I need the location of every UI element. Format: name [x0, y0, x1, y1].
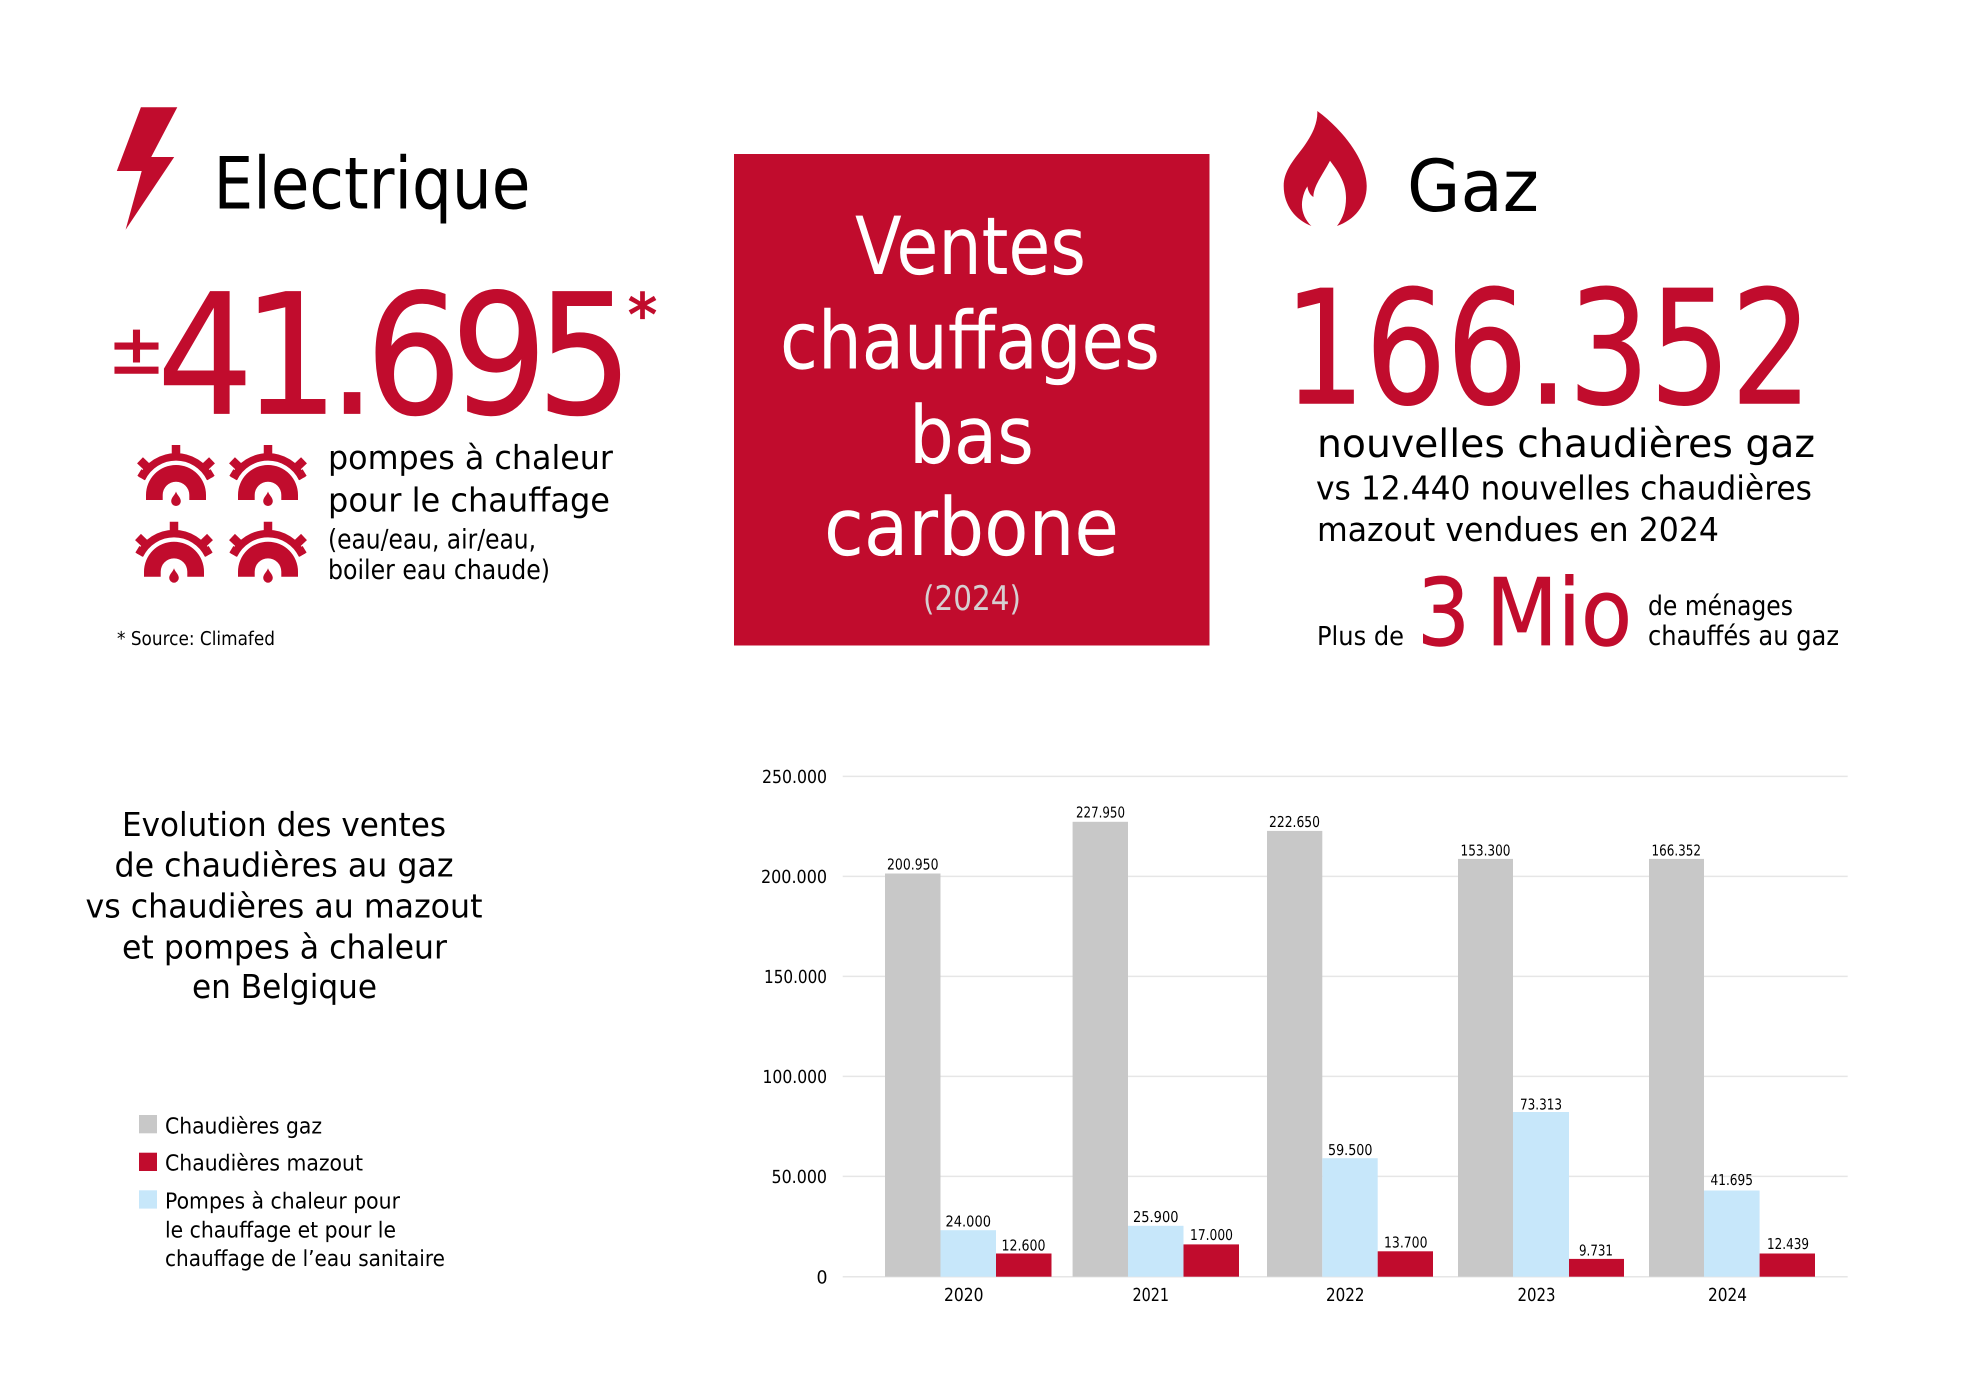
y axis labels: 0 [816, 1267, 828, 1288]
icon: flame [1284, 111, 1367, 226]
legend [139, 1114, 445, 1272]
big number: 166.352: 166.352 [1284, 257, 1812, 441]
title text: bas [909, 389, 1034, 482]
callout: 3 Mio households [1317, 559, 1839, 667]
legend: le chauffage et pour le [165, 1218, 396, 1243]
panel: central title [734, 154, 1210, 646]
icon: lightning bolt [117, 107, 177, 230]
legend: Pompes à chaleur pour [165, 1190, 401, 1215]
bars 2023 [1458, 842, 1624, 1306]
callout: 3 Mio households: Plus de [1317, 622, 1404, 652]
y axis labels: 50.000 [772, 1167, 827, 1188]
y axis labels: 150.000 [764, 967, 827, 988]
bars 2022: 222.650 [1269, 813, 1320, 831]
text: heat pump description [328, 438, 613, 586]
bars 2020: 24.000 [946, 1212, 991, 1230]
heading: chart title: de chaudières au gaz [114, 846, 454, 884]
bars 2020: 2020 [944, 1285, 984, 1306]
year: (2024) [923, 579, 1021, 619]
callout: 3 Mio households: 3 Mio [1417, 559, 1632, 667]
title text: Ventes [855, 200, 1086, 293]
panel: gaz [1284, 111, 1839, 667]
heading: chart title: Evolution des ventes [122, 805, 446, 844]
heading: Gaz: Gaz [1407, 144, 1539, 228]
text: heat pump description: pompes à chaleur [328, 438, 613, 477]
bars 2020: 12.600 [1002, 1236, 1046, 1254]
bars 2023: 9.731 [1579, 1242, 1613, 1260]
icons: heat pumps [138, 445, 304, 583]
bars 2021: 25.900 [1133, 1208, 1178, 1226]
y axis labels: 250.000 [762, 767, 827, 788]
title text: chauffages [780, 294, 1160, 388]
big number: 41.695: ± [108, 311, 165, 390]
legend: Chaudières gaz [165, 1114, 322, 1139]
callout: 3 Mio households: chauffés au gaz [1648, 621, 1839, 652]
bars 2020: 200.950 [887, 856, 938, 874]
source note: * Source: Climafed [117, 628, 275, 650]
bars 2022: 2022 [1326, 1285, 1364, 1306]
bars 2021: 227.950 [1076, 804, 1125, 822]
text: gas boiler description: mazout vendues en 2024 [1317, 510, 1719, 549]
text: heat pump description: pour le chauffage [328, 481, 610, 520]
y axis labels: 100.000 [762, 1067, 827, 1088]
bars 2022 [1267, 813, 1433, 1306]
bars 2024: 12.439 [1767, 1235, 1809, 1253]
bars 2022: 13.700 [1384, 1234, 1428, 1252]
heading: chart title: en Belgique [192, 967, 377, 1006]
text: gas boiler description: vs 12.440 nouvelles chaudières [1316, 468, 1812, 508]
callout: 3 Mio households: de ménages [1648, 591, 1793, 622]
bars 2024: 166.352 [1652, 842, 1701, 860]
bars 2023: 2023 [1518, 1285, 1556, 1306]
bars 2023: 73.313 [1520, 1095, 1562, 1113]
title text: carbone [824, 481, 1119, 574]
bars 2020 [885, 856, 1052, 1306]
text: gas boiler description: nouvelles chaudières gaz [1317, 422, 1815, 467]
heading: chart title: et pompes à chaleur [122, 928, 447, 966]
text: heat pump description: (eau/eau, air/eau, [328, 524, 536, 556]
heading: chart title [86, 805, 483, 1006]
panel: electrique [108, 107, 657, 650]
legend: chauffage de l’eau sanitaire [165, 1247, 445, 1272]
bars 2024: 2024 [1708, 1285, 1747, 1306]
text: heat pump description: boiler eau chaude) [328, 555, 550, 586]
text: gas boiler description [1316, 422, 1815, 549]
big number: 41.695: 41.695 [157, 259, 622, 453]
bars 2021 [1073, 804, 1239, 1306]
y axis labels: 200.000 [761, 867, 827, 888]
title text [780, 200, 1160, 574]
bars 2024 [1649, 842, 1815, 1306]
bar chart [761, 767, 1848, 1306]
y axis labels [761, 767, 828, 1288]
bars 2023: 153.300 [1460, 842, 1510, 860]
heading: chart title: vs chaudières au mazout [86, 886, 483, 926]
legend: Chaudières mazout [165, 1152, 363, 1177]
heading: Electrique: Electrique [214, 142, 530, 226]
bars 2022: 59.500 [1328, 1141, 1372, 1159]
big number: 41.695: * [628, 281, 657, 349]
bars 2021: 17.000 [1190, 1226, 1233, 1244]
bars 2021: 2021 [1132, 1285, 1169, 1306]
bars 2024: 41.695 [1710, 1171, 1753, 1189]
